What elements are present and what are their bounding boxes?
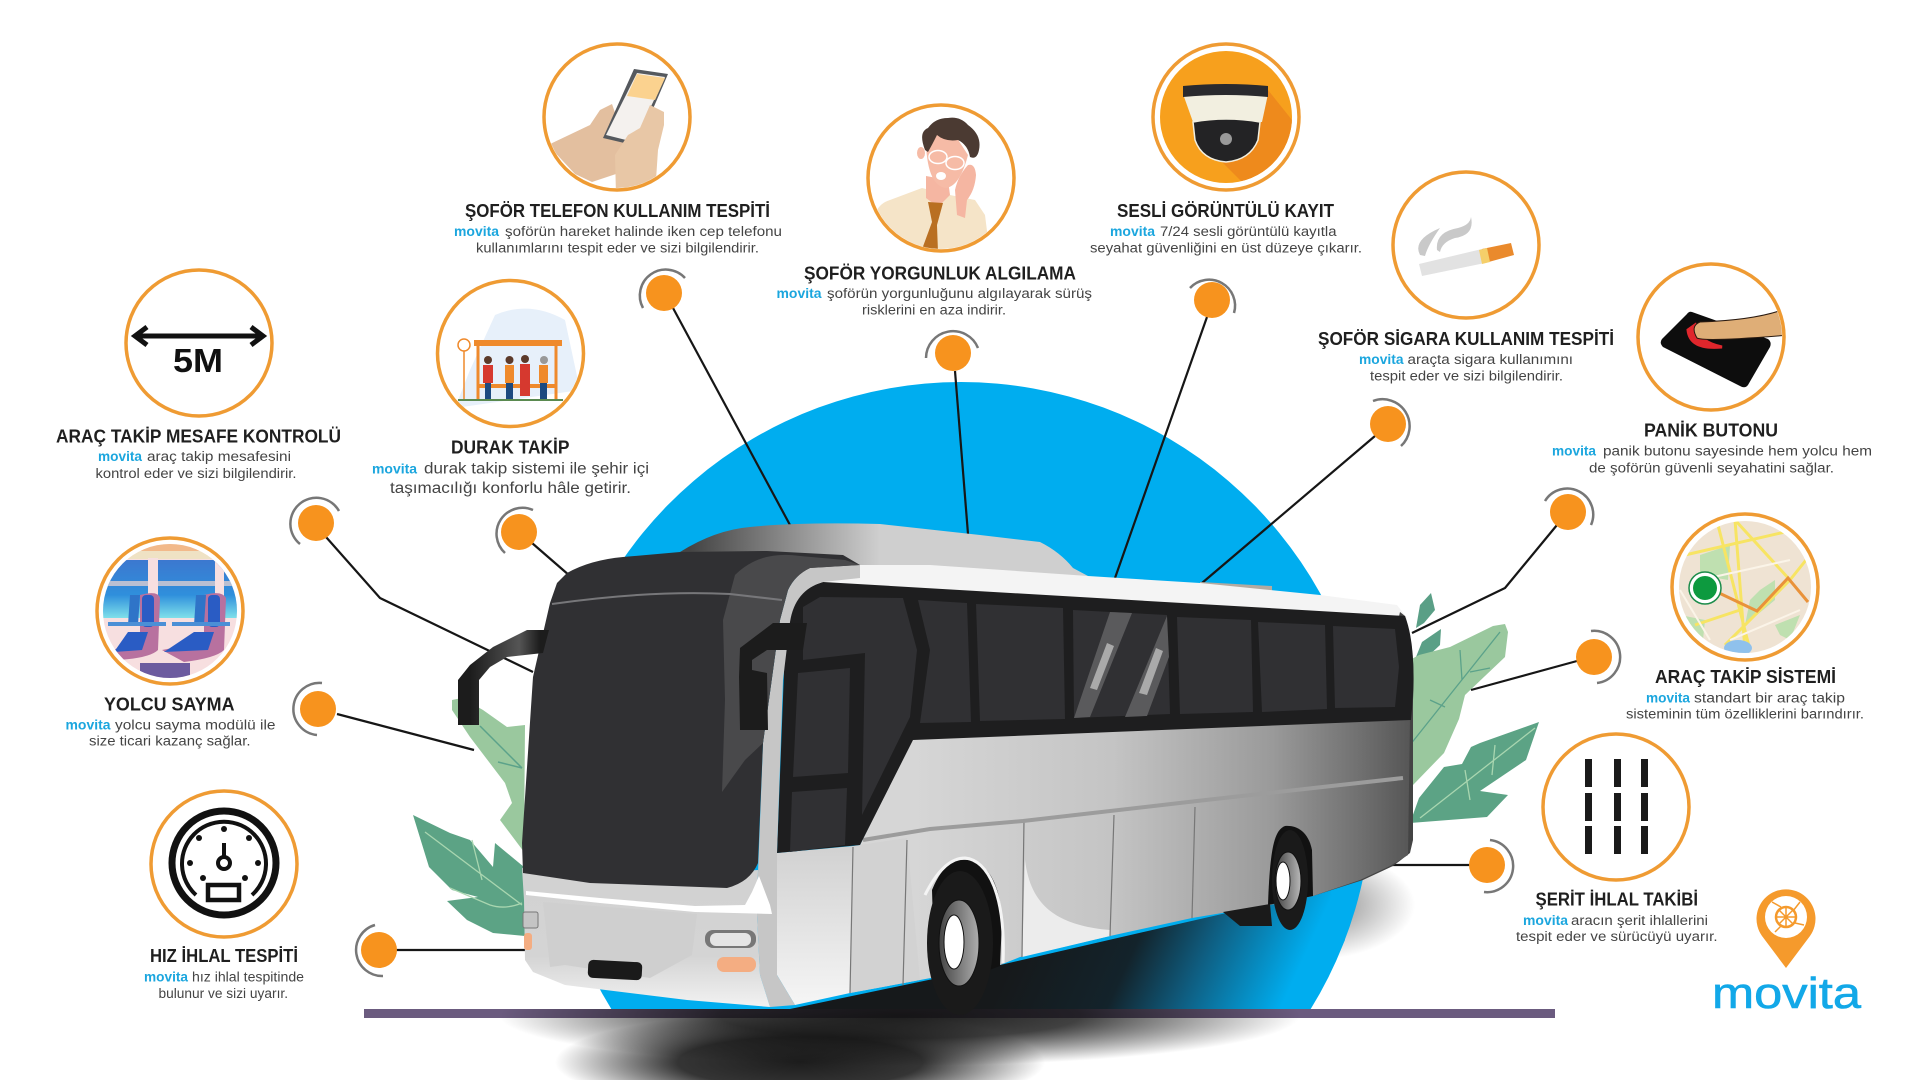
bus — [458, 523, 1414, 1015]
text — [1359, 351, 1573, 384]
marker — [290, 498, 339, 544]
marker — [1190, 280, 1235, 318]
text: movita — [1646, 690, 1690, 706]
text — [1626, 690, 1864, 722]
text — [1090, 223, 1362, 256]
text: şoförün hareket halinde iken cep telefonu — [505, 224, 782, 239]
text: durak takip sistemi ile şehir içi — [424, 460, 649, 478]
text — [1552, 442, 1872, 476]
windshield reflection — [722, 555, 860, 792]
marker — [293, 683, 336, 735]
icon: bus seats — [97, 538, 243, 685]
panel: passenger counting — [66, 538, 336, 748]
text — [454, 223, 782, 256]
marker — [1576, 631, 1620, 683]
front lower body — [522, 868, 770, 1007]
text: movita — [1523, 912, 1568, 928]
icon: speedometer — [151, 791, 297, 937]
heading: ARAÇ TAKİP MESAFE KONTROLÜ — [56, 426, 341, 446]
text: hız ihlal tespitinde — [192, 970, 304, 984]
inner wheel — [1223, 904, 1272, 926]
marker — [1370, 399, 1410, 446]
panel: vehicle tracking — [1576, 514, 1864, 722]
icon: map — [1670, 514, 1820, 660]
heading: SESLİ GÖRÜNTÜLÜ KAYIT — [1117, 201, 1334, 221]
text — [372, 460, 649, 497]
text: şoförün yorgunluğunu algılayarak sürüş — [827, 286, 1092, 301]
body seams — [850, 807, 1195, 993]
icon: location pin — [1756, 889, 1816, 968]
icon: tired driver — [868, 105, 1014, 255]
windshield — [522, 551, 860, 888]
marker — [640, 270, 685, 311]
lower grille panel — [543, 902, 697, 978]
text: seyahat güvenliğini en üst düzeye çıkarır. — [1090, 240, 1362, 256]
panel: lane violation — [1469, 734, 1718, 944]
text — [66, 716, 276, 748]
marker — [1469, 840, 1513, 892]
panel: stop tracking — [372, 280, 649, 553]
connector lines — [326, 308, 1577, 950]
text: bulunur ve sizi uyarır. — [158, 986, 288, 1001]
rear side grey shadow — [1205, 850, 1415, 960]
text: size ticari kazanç sağlar. — [89, 734, 251, 748]
panel: speed violation — [144, 791, 397, 1001]
text: tespit eder ve sizi bilgilendirir. — [1370, 368, 1563, 384]
window panes — [790, 597, 1399, 852]
leaves right — [1410, 593, 1539, 823]
text: 7/24 sesli görüntülü kayıtla — [1160, 224, 1337, 239]
A pillar — [757, 565, 860, 1007]
text: araç takip mesafesini — [147, 449, 291, 464]
headlight — [705, 930, 756, 948]
marker — [926, 331, 978, 371]
text: panik butonu sayesinde hem yolcu hem — [1603, 444, 1872, 458]
arch trim — [925, 858, 1003, 963]
heading: ŞERİT İHLAL TAKİBİ — [1536, 890, 1698, 910]
marker — [356, 925, 397, 976]
icon: phone in hand — [544, 44, 690, 195]
front handle — [588, 960, 642, 980]
ground shadow — [500, 1009, 1300, 1080]
text: kontrol eder ve sizi bilgilendirir. — [96, 466, 296, 481]
text: movita — [66, 716, 111, 732]
text: sisteminin tüm özelliklerini barındırır. — [1626, 706, 1864, 722]
text: movita — [1110, 223, 1155, 239]
text: standart bir araç takip — [1694, 690, 1845, 706]
heading: ŞOFÖR YORGUNLUK ALGILAMA — [804, 264, 1076, 284]
panel: following distance — [56, 270, 341, 544]
ground bar — [364, 1009, 1555, 1018]
heading: ŞOFÖR SİGARA KULLANIM TESPİTİ — [1318, 329, 1614, 349]
panel: fatigue detection — [776, 105, 1092, 371]
text — [96, 448, 296, 481]
leaves left — [413, 698, 525, 936]
icon: 5M distance — [126, 270, 272, 416]
text: movita — [776, 285, 822, 301]
panel: cigarette detection — [1318, 172, 1614, 446]
white roof strip — [795, 563, 1407, 625]
text — [144, 968, 304, 1001]
text: movita — [454, 223, 499, 239]
text: tespit eder ve sürücüyü uyarır. — [1516, 929, 1718, 944]
text — [776, 285, 1092, 318]
icon: 5M distance: 5M — [173, 342, 223, 379]
heading: HIZ İHLAL TESPİTİ — [150, 946, 298, 966]
panel: phone use detection — [454, 44, 782, 311]
text: movita — [98, 448, 142, 464]
text — [1516, 912, 1718, 944]
text: movita — [144, 968, 188, 984]
rear body edge — [1300, 612, 1414, 896]
blue circle backdrop — [550, 382, 1372, 1009]
right mirror — [739, 623, 807, 730]
window band — [777, 582, 1413, 853]
text: movita — [1359, 351, 1404, 367]
text: movita — [372, 460, 417, 476]
window reflections — [1074, 612, 1169, 718]
icon: lane markings — [1543, 734, 1689, 880]
logo: movita — [1712, 889, 1862, 1018]
panel: audio video recording — [1090, 44, 1362, 318]
body strip — [863, 778, 1403, 840]
icon: bus stop — [438, 280, 584, 426]
door lower panels — [777, 846, 853, 1005]
icon: cigarette — [1393, 172, 1539, 318]
heading: YOLCU SAYMA — [104, 694, 234, 714]
rear roof unit — [1200, 582, 1272, 600]
logo wordmark: movita — [1712, 969, 1862, 1018]
left corner lamps — [523, 912, 538, 950]
heading: ARAÇ TAKİP SİSTEMİ — [1655, 667, 1836, 687]
indicator — [717, 957, 756, 972]
marker — [1545, 489, 1593, 530]
heading: ŞOFÖR TELEFON KULLANIM TESPİTİ — [465, 201, 770, 221]
underbody shadow — [790, 890, 1345, 1009]
rear wheel arch — [1268, 826, 1313, 905]
rear wheel — [1272, 830, 1308, 930]
text: araçta sigara kullanımını — [1408, 352, 1573, 367]
text: aracın şerit ihlallerini — [1571, 913, 1708, 928]
upper side panel — [850, 718, 1410, 993]
icon: panic button — [1638, 264, 1790, 410]
text: risklerini en aza indirir. — [862, 302, 1006, 318]
white strip — [526, 876, 772, 914]
windshield visor line — [552, 593, 782, 604]
text: taşımacılığı konforlu hâle getirir. — [390, 480, 631, 497]
text: de şoförün güvenli seyahatini sağlar. — [1589, 460, 1834, 476]
heading: PANİK BUTONU — [1644, 420, 1778, 440]
left mirror — [458, 630, 549, 725]
text: movita — [1552, 442, 1596, 458]
text: yolcu sayma modülü ile — [115, 718, 276, 732]
text: kullanımlarını tespit eder ve sizi bilgilendirir. — [476, 240, 759, 256]
front wheel — [927, 871, 993, 1015]
marker — [497, 508, 537, 553]
panel: panic button — [1545, 264, 1872, 530]
heading: DURAK TAKİP — [451, 438, 570, 458]
roof dome — [680, 523, 1088, 590]
icon: dome camera — [1153, 44, 1300, 190]
white sweep panel — [1022, 860, 1110, 957]
front wheel arch — [932, 860, 1002, 990]
